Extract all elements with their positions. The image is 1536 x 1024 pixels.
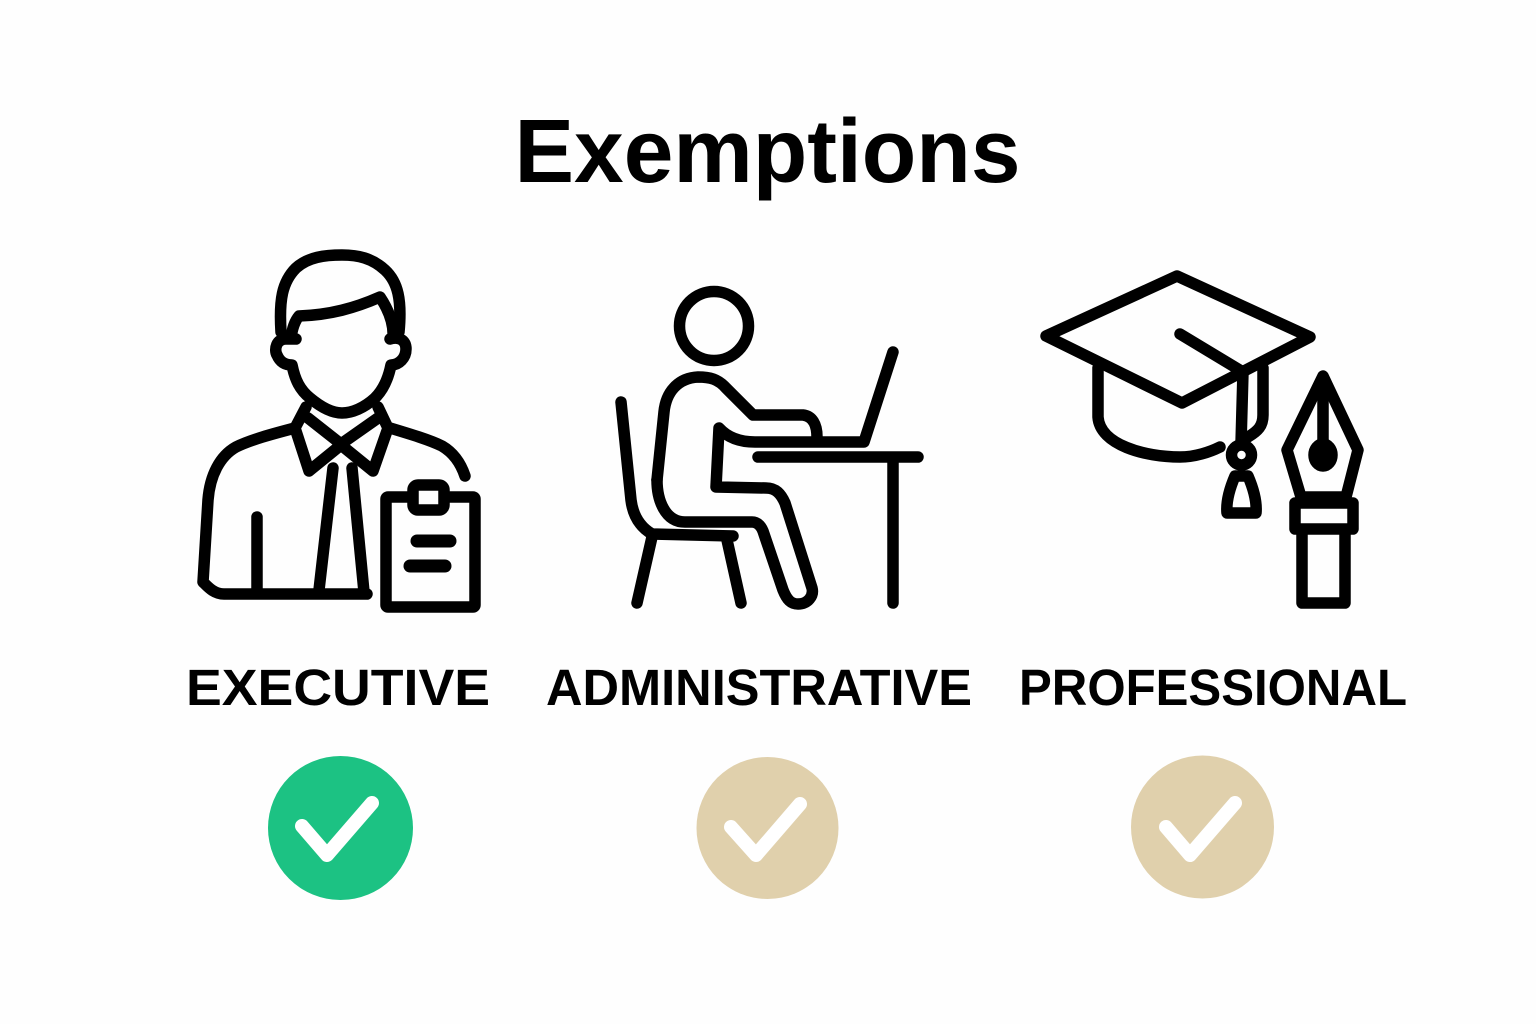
label: administrative: ADMINISTRATIVE [546,659,972,716]
label: professional: PROFESSIONAL [1019,659,1407,716]
icon: tan check badge administrative [696,757,838,899]
icon: administrative worker at desk [621,292,918,604]
icon: executive with clipboard [203,255,475,607]
label: executive: EXECUTIVE [186,659,490,716]
title: Exemptions [514,102,1020,202]
icon: graduation cap and fountain pen [1046,276,1358,603]
icon: tan check badge professional [1131,756,1274,898]
icon: green check badge [268,756,413,900]
